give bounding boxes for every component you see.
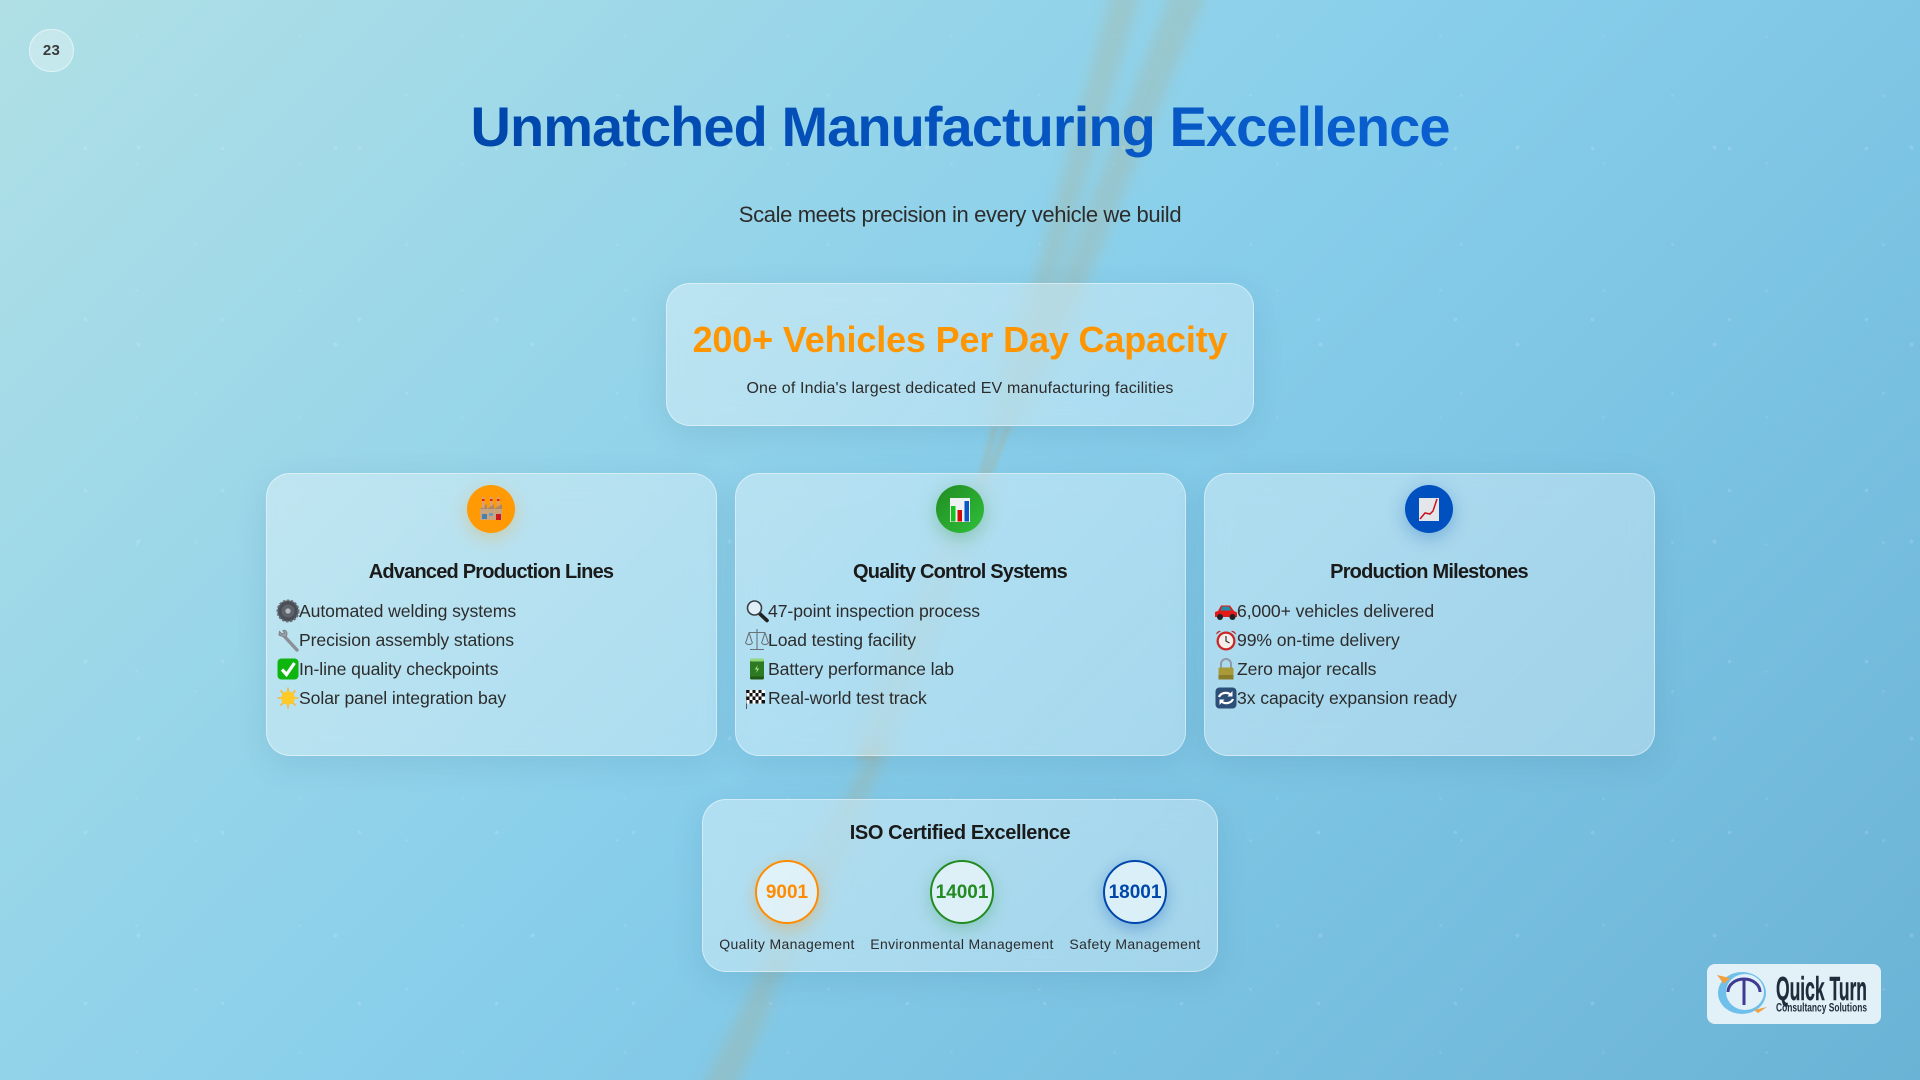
badge: ISO 14001: 14001 — [936, 882, 988, 903]
feature list: Automated welding systems — [299, 601, 516, 621]
subtitle: Scale meets precision in every vehicle we build — [739, 202, 1181, 227]
list item: on-time delivery — [1216, 630, 1400, 650]
label: environmental management: Environmental Management — [870, 936, 1054, 952]
feature list: Load testing facility — [768, 630, 916, 650]
feature list: In-line quality checkpoints — [299, 659, 498, 679]
label: safety management: Safety Management — [1069, 936, 1201, 952]
list item: inspection — [746, 600, 980, 622]
page number badge — [29, 29, 74, 72]
list item: zero recalls — [1218, 658, 1376, 680]
list item: test track — [746, 688, 927, 709]
card heading: Quality Control Systems — [853, 561, 1067, 583]
logo: Quick Turn Consultancy Solutions — [1707, 964, 1881, 1024]
feature list: 99% on-time delivery — [1237, 630, 1400, 650]
panel: ISO certifications — [702, 799, 1218, 972]
panel: advanced production lines — [266, 473, 716, 756]
badge: ISO 18001 — [1103, 860, 1167, 924]
list item: vehicles delivered — [1215, 601, 1434, 621]
list item: load testing — [745, 629, 916, 650]
list item: battery — [750, 658, 954, 680]
feature list: 3x capacity expansion ready — [1237, 688, 1457, 708]
icon: bar chart — [936, 485, 984, 533]
panel: production milestones — [1204, 473, 1654, 756]
capacity headline: 200+ Vehicles Per Day Capacity — [693, 318, 1227, 360]
capacity description: One of India's largest dedicated EV manufacturing facilities — [746, 380, 1174, 396]
icon: line chart — [1405, 485, 1453, 533]
title: Unmatched Manufacturing Excellence — [470, 95, 1450, 158]
badge: ISO 9001: 9001 — [766, 882, 808, 903]
page number badge: 23 — [43, 42, 60, 59]
feature list: 6,000+ vehicles delivered — [1237, 601, 1434, 621]
badge: ISO 18001: 18001 — [1109, 882, 1161, 903]
feature list: Solar panel integration bay — [299, 688, 506, 708]
list item: solar — [278, 688, 506, 708]
card heading: Production Milestones — [1330, 561, 1528, 583]
badge: ISO 14001 — [930, 860, 994, 924]
feature list: Battery performance lab — [768, 659, 954, 679]
card heading: Advanced Production Lines — [369, 561, 613, 583]
icon: factory — [467, 485, 515, 533]
list item: capacity expansion — [1216, 688, 1457, 708]
list item: welding — [276, 600, 516, 622]
feature list: Real-world test track — [768, 688, 927, 708]
feature list — [276, 600, 516, 708]
feature list: Precision assembly stations — [299, 630, 514, 650]
panel: capacity highlight — [666, 283, 1254, 426]
label: quality management: Quality Management — [719, 936, 855, 952]
list item: checkpoints — [278, 658, 498, 680]
ISO heading: ISO Certified Excellence — [850, 822, 1070, 844]
feature list — [745, 600, 980, 709]
feature list: Zero major recalls — [1237, 659, 1376, 679]
feature list — [1215, 601, 1457, 708]
list item: assembly — [278, 630, 514, 652]
panel: quality control systems — [734, 473, 1186, 756]
badge: ISO 9001 — [755, 860, 819, 924]
feature list: 47-point inspection process — [768, 601, 980, 621]
